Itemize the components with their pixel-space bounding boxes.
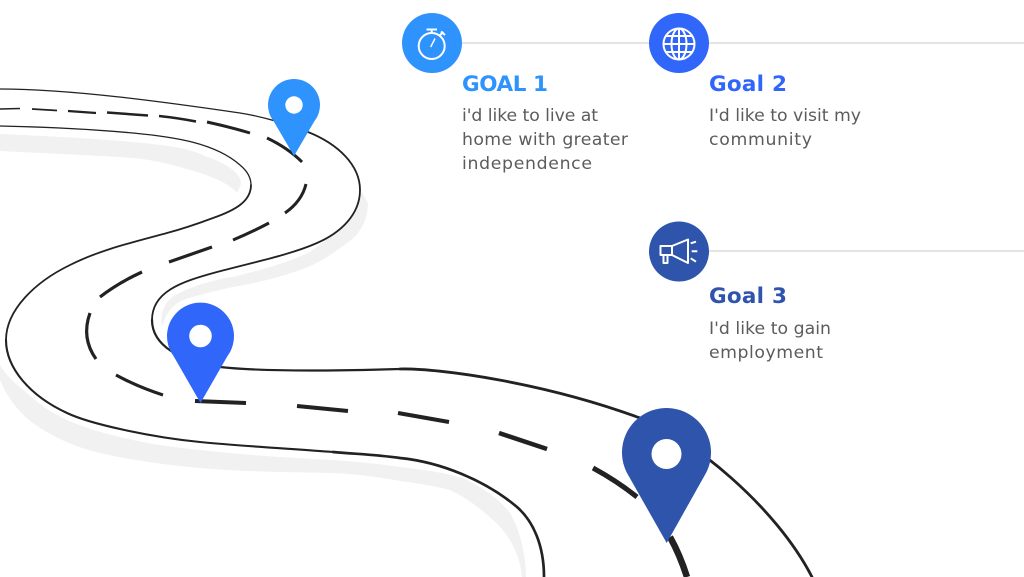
goal 1 text: home with greater [462, 130, 629, 150]
icon: megaphone [649, 222, 709, 282]
goal 2 text: I'd like to visit my [709, 106, 861, 126]
pin 2 [167, 303, 234, 403]
goal 2 text: community [709, 130, 812, 150]
road centre dashes [0, 108, 687, 577]
connector lines [460, 43, 1024, 251]
goal 3 text: Goal 3 [709, 284, 787, 309]
pin 1 [268, 79, 320, 156]
goal 2 text [709, 72, 861, 150]
goal 1 text: GOAL 1 [462, 72, 548, 97]
road shadows [0, 134, 526, 577]
road edges [0, 89, 812, 577]
goal 2 text: Goal 2 [709, 72, 787, 97]
icon: stopwatch [402, 13, 462, 73]
goal 1 text [462, 72, 629, 174]
goal 3 text [709, 284, 831, 363]
goal 1 text: i'd like to live at [462, 106, 598, 126]
goal 1 text: independence [462, 154, 592, 174]
road surface [0, 89, 812, 577]
icon: globe [649, 13, 709, 73]
goal 3 text: employment [709, 343, 823, 363]
road illustration [0, 89, 812, 577]
goal 3 text: I'd like to gain [709, 319, 831, 339]
pin 3 [622, 408, 711, 543]
